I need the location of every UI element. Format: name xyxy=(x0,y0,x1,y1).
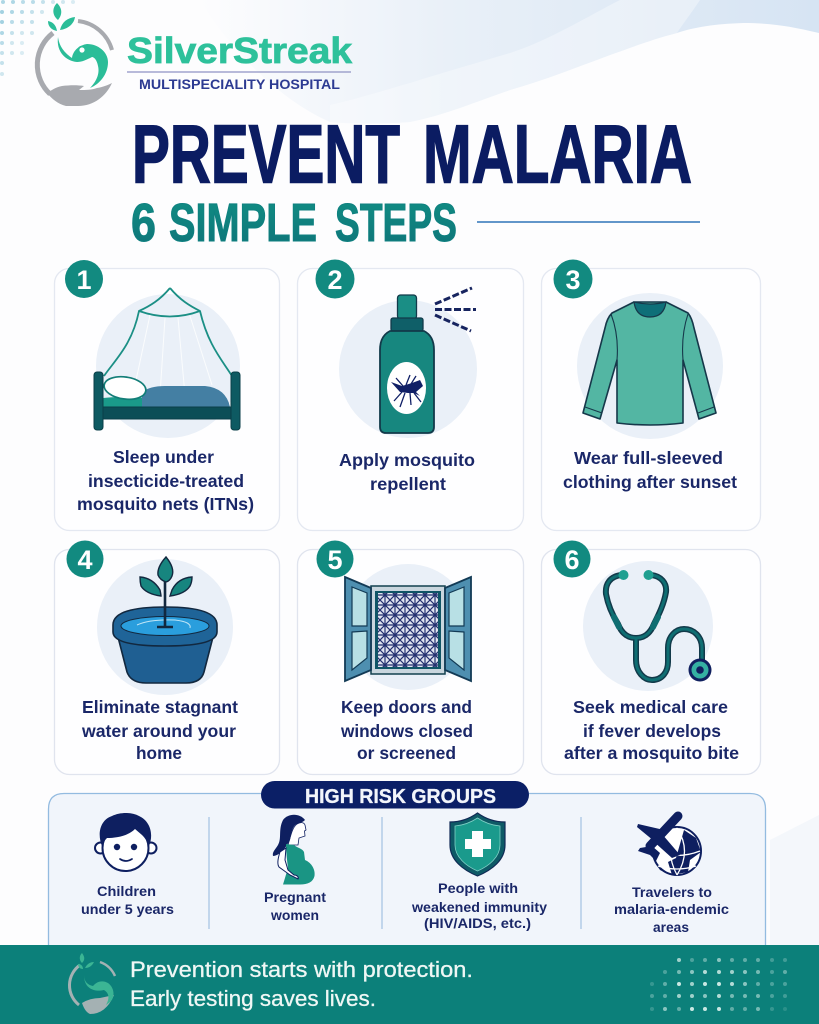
footer banner xyxy=(0,945,819,1024)
panel: step 5 xyxy=(298,550,524,774)
number badge 1: 1 xyxy=(76,265,92,295)
step 6 text: after a mosquito bite xyxy=(564,743,739,763)
subtitle xyxy=(131,193,457,253)
pregnant label xyxy=(264,890,327,923)
travelers label: Travelers to xyxy=(632,885,712,900)
step 5 text: Keep doors and xyxy=(341,697,472,717)
number badge 2: 2 xyxy=(327,265,343,295)
number badge 6 xyxy=(554,540,590,578)
step 2 text: repellent xyxy=(370,474,446,494)
children label: Children xyxy=(97,884,156,899)
number badge 3 xyxy=(554,260,592,298)
heading pill: HIGH RISK GROUPS xyxy=(305,786,496,808)
step 5 text xyxy=(340,697,473,763)
step 4 text: home xyxy=(136,743,182,763)
number badge 1 xyxy=(65,260,103,298)
step 4 text: water around your xyxy=(81,721,236,741)
children label: under 5 years xyxy=(81,902,174,917)
footer message: Early testing saves lives. xyxy=(130,986,376,1011)
number badge 4: 4 xyxy=(77,545,93,575)
number badge 6: 6 xyxy=(564,545,580,575)
icon: plant pot with water xyxy=(113,557,217,683)
subtitle: STEPS xyxy=(335,193,457,253)
title: MALARIA xyxy=(423,108,692,200)
step 1 text: Sleep under xyxy=(113,447,214,467)
heading pill xyxy=(261,781,529,808)
step 1 text: insecticide-treated xyxy=(88,471,244,491)
step 1 text: mosquito nets (ITNs) xyxy=(77,494,254,514)
footer message: Prevention starts with protection. xyxy=(130,957,473,982)
subtitle: 6 xyxy=(131,193,156,253)
step 2 text xyxy=(339,450,475,494)
step 3 text xyxy=(563,448,737,492)
number badge 4 xyxy=(66,540,104,578)
icon: plane and globe xyxy=(637,816,701,875)
logo mark xyxy=(37,3,112,106)
brand subtitle: MULTISPECIALITY HOSPITAL xyxy=(139,77,340,92)
brand name: SilverStreak xyxy=(127,30,353,71)
icon: stethoscope xyxy=(606,570,712,682)
panel: step 4 xyxy=(54,550,280,774)
panel: step 3 xyxy=(542,268,760,530)
number badge 5 xyxy=(316,540,354,578)
icon: screened window xyxy=(345,577,471,681)
step 1 text xyxy=(77,447,254,514)
step 6 text: Seek medical care xyxy=(573,697,728,717)
number badge 2 xyxy=(316,260,354,298)
icon: shield xyxy=(450,813,505,876)
step 5 text: windows closed xyxy=(340,721,473,741)
step 6 text xyxy=(564,697,739,763)
footer message xyxy=(130,957,473,1011)
step 4 text xyxy=(81,697,238,763)
icon: pregnant woman xyxy=(273,815,315,884)
icon: repellent spray xyxy=(380,288,476,433)
pregnant label: Pregnant xyxy=(264,890,327,905)
footer logo xyxy=(69,953,115,1014)
step 6 text: if fever develops xyxy=(583,721,721,741)
number badge 5: 5 xyxy=(327,545,343,575)
immunity label: (HIV/AIDS, etc.) xyxy=(424,916,531,931)
subtitle: SIMPLE xyxy=(169,193,317,253)
decorative dot grid xyxy=(0,0,75,76)
panel: step 6 xyxy=(542,550,760,774)
travelers label xyxy=(614,885,730,935)
footer dots xyxy=(650,958,787,1011)
title: PREVENT xyxy=(132,108,400,200)
step 5 text: or screened xyxy=(357,743,456,763)
icon: child xyxy=(95,813,156,871)
icon: bed with net xyxy=(94,288,240,430)
immunity label xyxy=(411,881,548,931)
step 3 text: clothing after sunset xyxy=(563,472,737,492)
panel: step 1 xyxy=(54,268,280,530)
panel: step 2 xyxy=(298,268,524,530)
travelers label: malaria-endemic xyxy=(614,902,730,917)
step 3 text: Wear full-sleeved xyxy=(574,448,723,468)
step 2 text: Apply mosquito xyxy=(339,450,475,470)
immunity label: weakened immunity xyxy=(411,900,548,915)
children label xyxy=(81,884,174,917)
pregnant label: women xyxy=(270,908,319,923)
number badge 3: 3 xyxy=(565,265,581,295)
panel: high risk groups xyxy=(48,781,766,960)
travelers label: areas xyxy=(653,920,689,935)
icon: long-sleeved shirt xyxy=(583,302,716,425)
immunity label: People with xyxy=(438,881,518,896)
logo xyxy=(37,3,353,106)
step 4 text: Eliminate stagnant xyxy=(82,697,238,717)
